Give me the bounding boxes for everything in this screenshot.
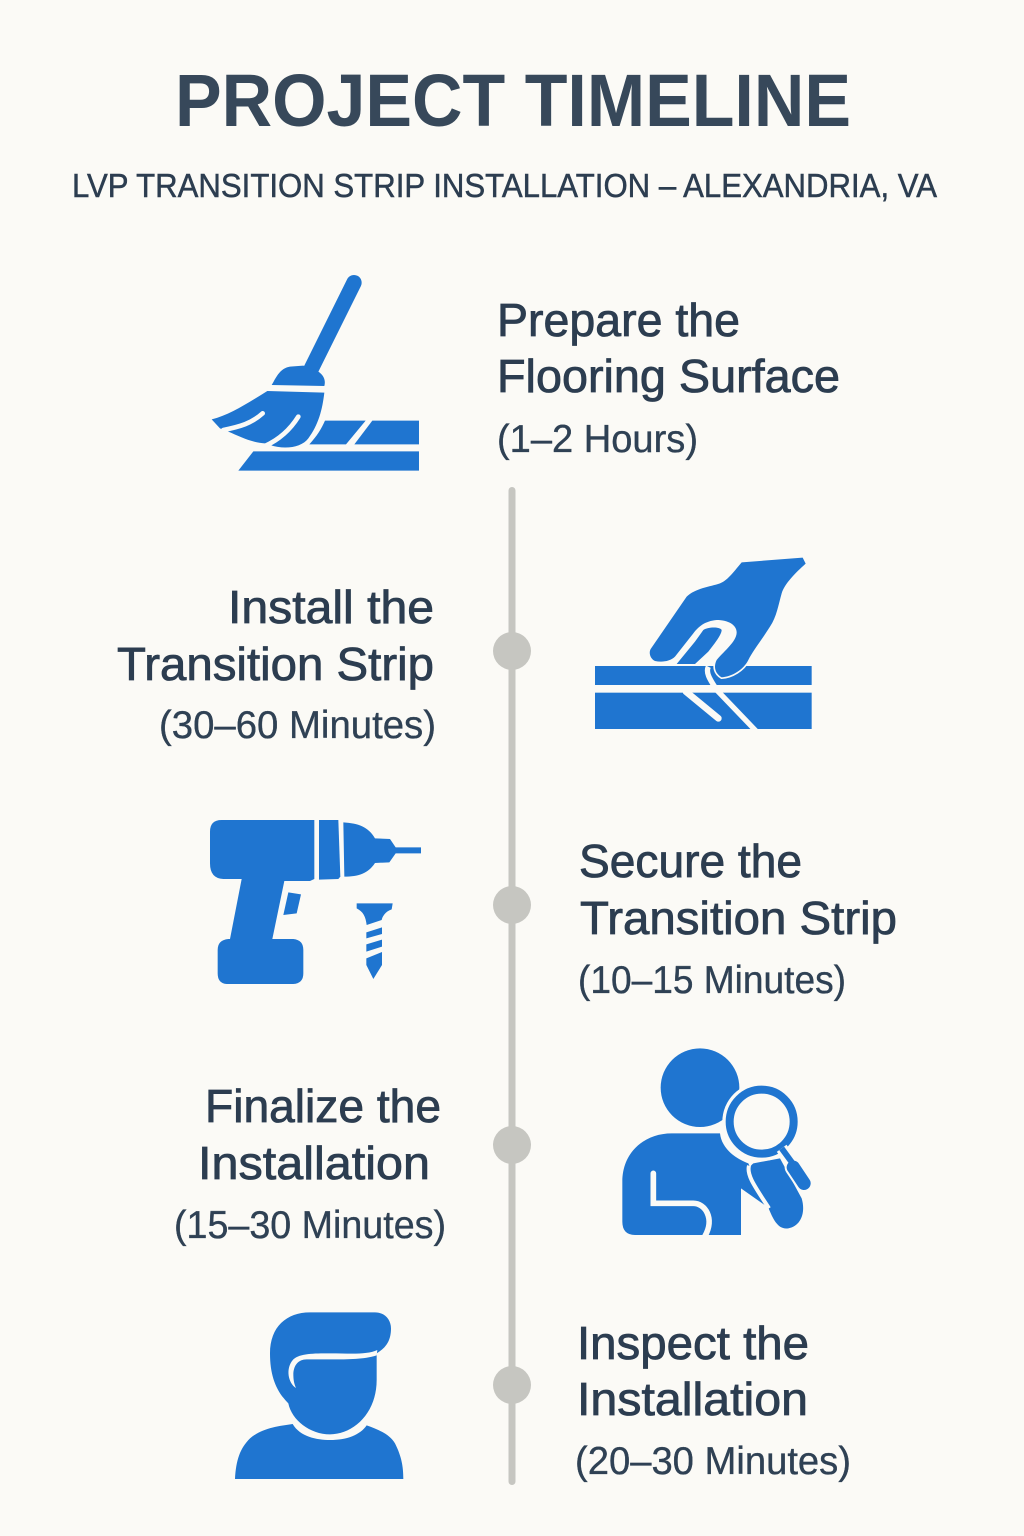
step 4 text: (15–30 Minutes) [174, 1204, 446, 1247]
step 5 text: Inspect the [577, 1317, 809, 1369]
step 2 text: Install the [228, 581, 434, 633]
step 4 text: Installation [198, 1137, 430, 1189]
step 3 text: Secure the [579, 835, 802, 887]
timeline axis [493, 487, 531, 1485]
icon: person head and shoulders [235, 1312, 403, 1479]
step 5 text: (20–30 Minutes) [575, 1440, 851, 1483]
step 4 text [174, 1080, 446, 1247]
step 3 text [578, 835, 897, 1002]
icon: hand pressing transition strip [595, 558, 812, 732]
step 2 text: (30–60 Minutes) [159, 704, 436, 747]
step 2 text [117, 581, 436, 747]
step 5 text [575, 1317, 851, 1483]
step 1 text: Prepare the [497, 294, 740, 346]
step 3 text: (10–15 Minutes) [578, 959, 846, 1002]
icon: person with magnifying glass [622, 1048, 804, 1236]
step 1 text: Flooring Surface [497, 350, 840, 402]
step 1 text: (1–2 Hours) [497, 418, 698, 461]
subtitle: LVP TRANSITION STRIP INSTALLATION – ALEXANDRIA, VA [72, 168, 938, 205]
step 3 text: Transition Strip [580, 892, 897, 944]
step 5 text: Installation [577, 1373, 808, 1425]
icon: broom sweeping floor [212, 283, 419, 471]
step 2 text: Transition Strip [117, 638, 434, 690]
step 1 text [497, 294, 840, 461]
icon: power drill and screw [210, 820, 421, 984]
step 4 text: Finalize the [205, 1080, 441, 1132]
title: PROJECT TIMELINE [175, 59, 851, 142]
